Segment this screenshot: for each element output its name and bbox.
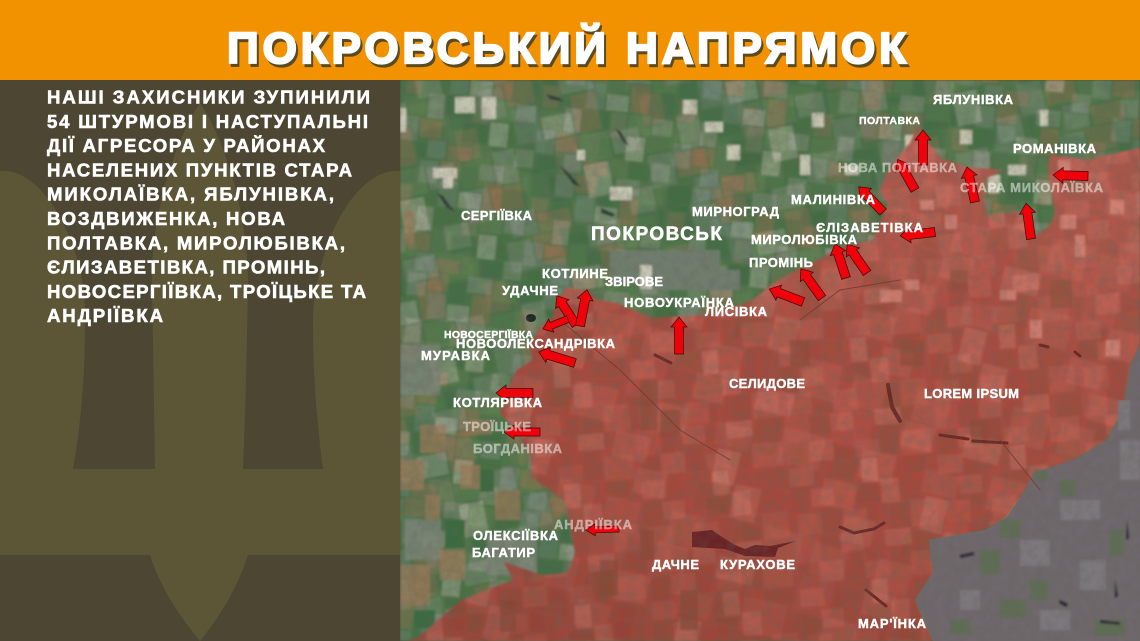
satellite fields base — [400, 80, 1140, 641]
label: Lorem Ipsum: LOREM IPSUM — [924, 386, 1019, 401]
ravines — [560, 280, 1080, 606]
arrow: Nova Poltavka — [891, 156, 922, 194]
arrows — [496, 130, 1088, 536]
arrow: Promin 1 — [794, 264, 828, 303]
grey zone details — [950, 400, 1140, 636]
text block — [46, 86, 370, 326]
text block: АНДРІЇВКА — [47, 305, 163, 326]
label: Dachne: ДАЧНЕ — [652, 557, 699, 572]
texture overlay — [400, 80, 1140, 641]
arrow: Novooleksandrivka — [536, 344, 577, 371]
arrow: Novoserhiivka — [540, 313, 571, 336]
occupied territory (red zone) — [400, 80, 1140, 641]
arrow: Udachne — [550, 291, 583, 329]
text block: 54 ШТУРМОВІ І НАСТУПАЛЬНІ — [47, 111, 368, 132]
label: Marinka: МАР'ЇНКА — [858, 616, 927, 631]
icon: trident watermark — [0, 104, 400, 640]
arrow: Novoukrainka — [671, 317, 687, 354]
arrow: Malynivka — [853, 181, 889, 218]
label: Troitske: ТРОЇЦЬКЕ — [463, 419, 531, 434]
label: Nova Poltavka: НОВА ПОЛТАВКА — [838, 160, 958, 175]
label: Bahatyr: БАГАТИР — [472, 545, 535, 560]
place labels — [421, 92, 1104, 631]
map panel — [400, 80, 1140, 641]
label: Kurakhove: КУРАХОВЕ — [720, 557, 795, 572]
arrow: Stara Mykolaivka west — [959, 165, 983, 204]
arrow: Myroliubivka 1 — [827, 241, 854, 280]
text block: ВОЗДВИЖЕНКА, НОВА — [47, 208, 285, 229]
label: Lysivka: ЛИСІВКА — [705, 304, 768, 319]
government-held east (grey zone) — [915, 345, 1140, 641]
label: Malynivka: МАЛИНІВКА — [791, 192, 876, 207]
label: Kotliarivka: КОТЛЯРІВКА — [453, 395, 543, 410]
label: Zvirove: ЗВІРОВЕ — [605, 274, 663, 289]
label: Promin: ПРОМІНЬ — [749, 255, 813, 270]
label: Serhiivka: СЕРГІЇВКА — [461, 208, 533, 223]
label: Udachne: УДАЧНЕ — [502, 283, 558, 298]
reservoir: Kurakhove — [692, 530, 796, 557]
arrow: Andriivka — [586, 523, 619, 536]
arrow: Kotliarivka — [496, 385, 533, 401]
text block: ЄЛИЗАВЕТІВКА, ПРОМІНЬ, — [47, 257, 325, 278]
label: Novoserhiivka: НОВОСЕРГІЇВКА — [444, 328, 533, 341]
label: Romanivka: РОМАНІВКА — [1013, 141, 1097, 156]
arrow: Poltavka — [915, 130, 931, 165]
label: Yelyzavetivka: ЄЛІЗАВЕТІВКА — [816, 220, 924, 235]
label: Oleksiivka: ОЛЕКСІЇВКА — [473, 528, 559, 543]
label: Andriivka: АНДРІЇВКА — [554, 517, 633, 532]
label: Selydove: СЕЛИДОВЕ — [729, 376, 805, 391]
header band — [0, 0, 1140, 80]
label: Poltavka: ПОЛТАВКА — [859, 115, 920, 127]
label: Kotlyne: КОТЛИНЕ — [542, 266, 608, 281]
text block: НАСЕЛЕНИХ ПУНКТІВ СТАРА — [47, 159, 352, 180]
arrow: Stara Mykolaivka south — [1018, 202, 1039, 240]
label: Novoukrainka: НОВОУКРАЇНКА — [624, 295, 735, 310]
label: Yablunivka: ЯБЛУНІВКА — [933, 92, 1014, 107]
water body: Udachne pond — [526, 314, 536, 322]
label: Pokrovsk: ПОКРОВСЬК — [591, 224, 722, 245]
text block: НАШІ ЗАХИСНИКИ ЗУПИНИЛИ — [47, 86, 370, 108]
text block: ПОЛТАВКА, МИРОЛЮБІВКА, — [47, 232, 345, 253]
arrow: Romanivka — [1053, 167, 1088, 184]
label: Bohdanivka: БОГДАНІВКА — [473, 441, 563, 456]
label: Myrnohrad: МИРНОГРАД — [692, 204, 780, 219]
text block: НОВОСЕРГІЇВКА, ТРОЇЦЬКЕ ТА — [47, 281, 366, 302]
panel: left text panel — [0, 80, 400, 641]
label: Stara Mykolaivka: СТАРА МИКОЛАЇВКА — [960, 180, 1104, 195]
arrow: Myroliubivka 2 — [841, 240, 874, 278]
arrow: Promin 2 — [767, 282, 806, 309]
label: Novooleksandrivka: НОВООЛЕКСАНДРІВКА — [456, 336, 616, 351]
arrow: Troitske — [504, 425, 540, 439]
label: Muravka: МУРАВКА — [421, 348, 491, 363]
arrow: Yelyzavetivka — [899, 224, 936, 244]
text block: МИКОЛАЇВКА, ЯБЛУНІВКА, — [47, 184, 334, 205]
text block: ДІЇ АГРЕСОРА У РАЙОНАХ — [47, 135, 326, 156]
title: ПОКРОВСЬКИЙ НАПРЯМОК — [227, 22, 906, 73]
label: Myroliubivka: МИРОЛЮБІВКА — [751, 232, 858, 247]
arrow: Kotlyne — [572, 288, 595, 328]
